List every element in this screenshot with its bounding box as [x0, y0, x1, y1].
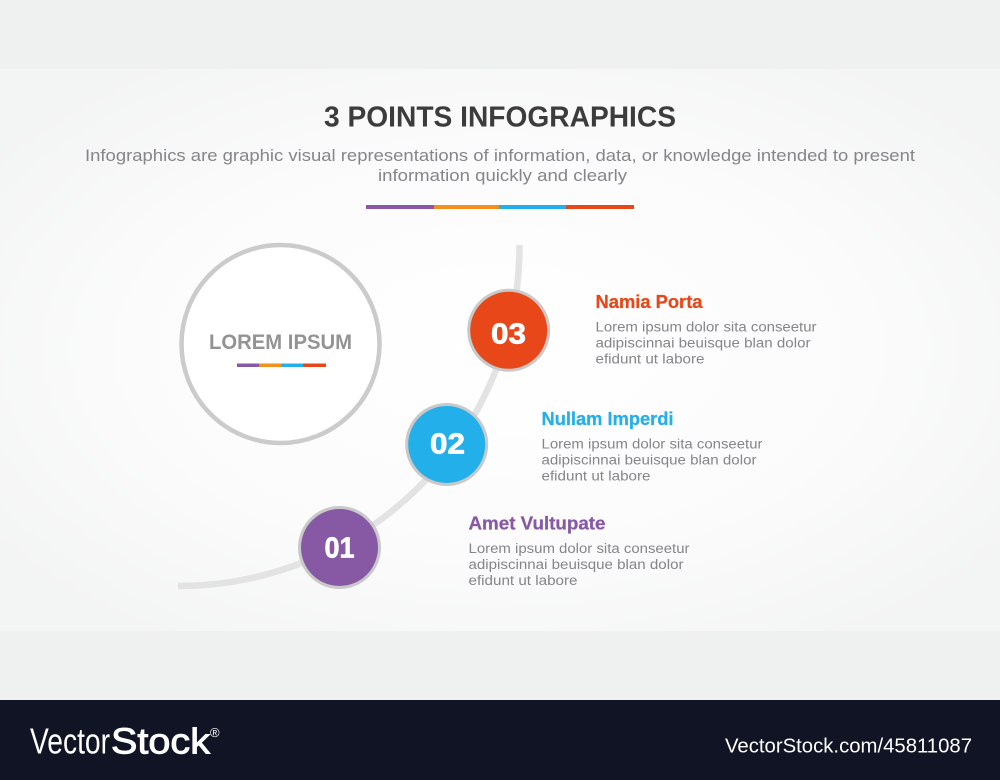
- point 03 text: Namia Porta: [596, 292, 703, 312]
- point 02 text: Lorem ipsum dolor sita conseetur: [542, 436, 763, 452]
- point 01 badge: 01: [324, 532, 354, 564]
- point 01 text: [468, 514, 690, 588]
- point 02 text: [542, 409, 763, 484]
- central circle colour bar: [237, 364, 326, 367]
- point 02 text: Nullam Imperdi: [542, 409, 674, 429]
- footer logo: Stock: [111, 720, 211, 762]
- point 02 badge: 02: [430, 428, 465, 460]
- point 03 text: [596, 292, 817, 366]
- point 02 text: adipiscinnai beuisque blan dolor: [542, 452, 757, 468]
- footer logo: Vector: [30, 720, 110, 762]
- point 02 badge: [407, 404, 487, 484]
- point 01 text: efidunt ut labore: [468, 573, 578, 588]
- footer bar: [0, 700, 1000, 780]
- footer logo: [30, 720, 220, 762]
- title: 3 POINTS INFOGRAPHICS: [324, 102, 676, 134]
- point 01 text: adipiscinnai beuisque blan dolor: [468, 557, 684, 572]
- point 02 text: efidunt ut labore: [542, 468, 650, 484]
- title colour bar: [366, 205, 634, 209]
- point 03 text: efidunt ut labore: [596, 352, 704, 366]
- point 01 badge: [300, 508, 380, 588]
- footer image id: VectorStock.com/45811087: [725, 734, 972, 758]
- point 03 badge: 03: [491, 318, 526, 350]
- subtitle: [85, 146, 915, 185]
- point 01 text: Amet Vultupate: [468, 514, 606, 534]
- central circle label: LOREM IPSUM: [209, 330, 352, 354]
- subtitle: Infographics are graphic visual representations of information, data, or knowledge intended to present: [85, 146, 915, 165]
- point 01 text: Lorem ipsum dolor sita conseetur: [468, 541, 690, 556]
- point 03 badge: [469, 290, 549, 370]
- subtitle: information quickly and clearly: [378, 166, 628, 185]
- central circle: [182, 245, 380, 443]
- point 03 text: adipiscinnai beuisque blan dolor: [596, 336, 811, 350]
- footer logo: ®: [210, 725, 220, 740]
- curved timeline: [178, 245, 520, 586]
- point 03 text: Lorem ipsum dolor sita conseetur: [596, 320, 817, 334]
